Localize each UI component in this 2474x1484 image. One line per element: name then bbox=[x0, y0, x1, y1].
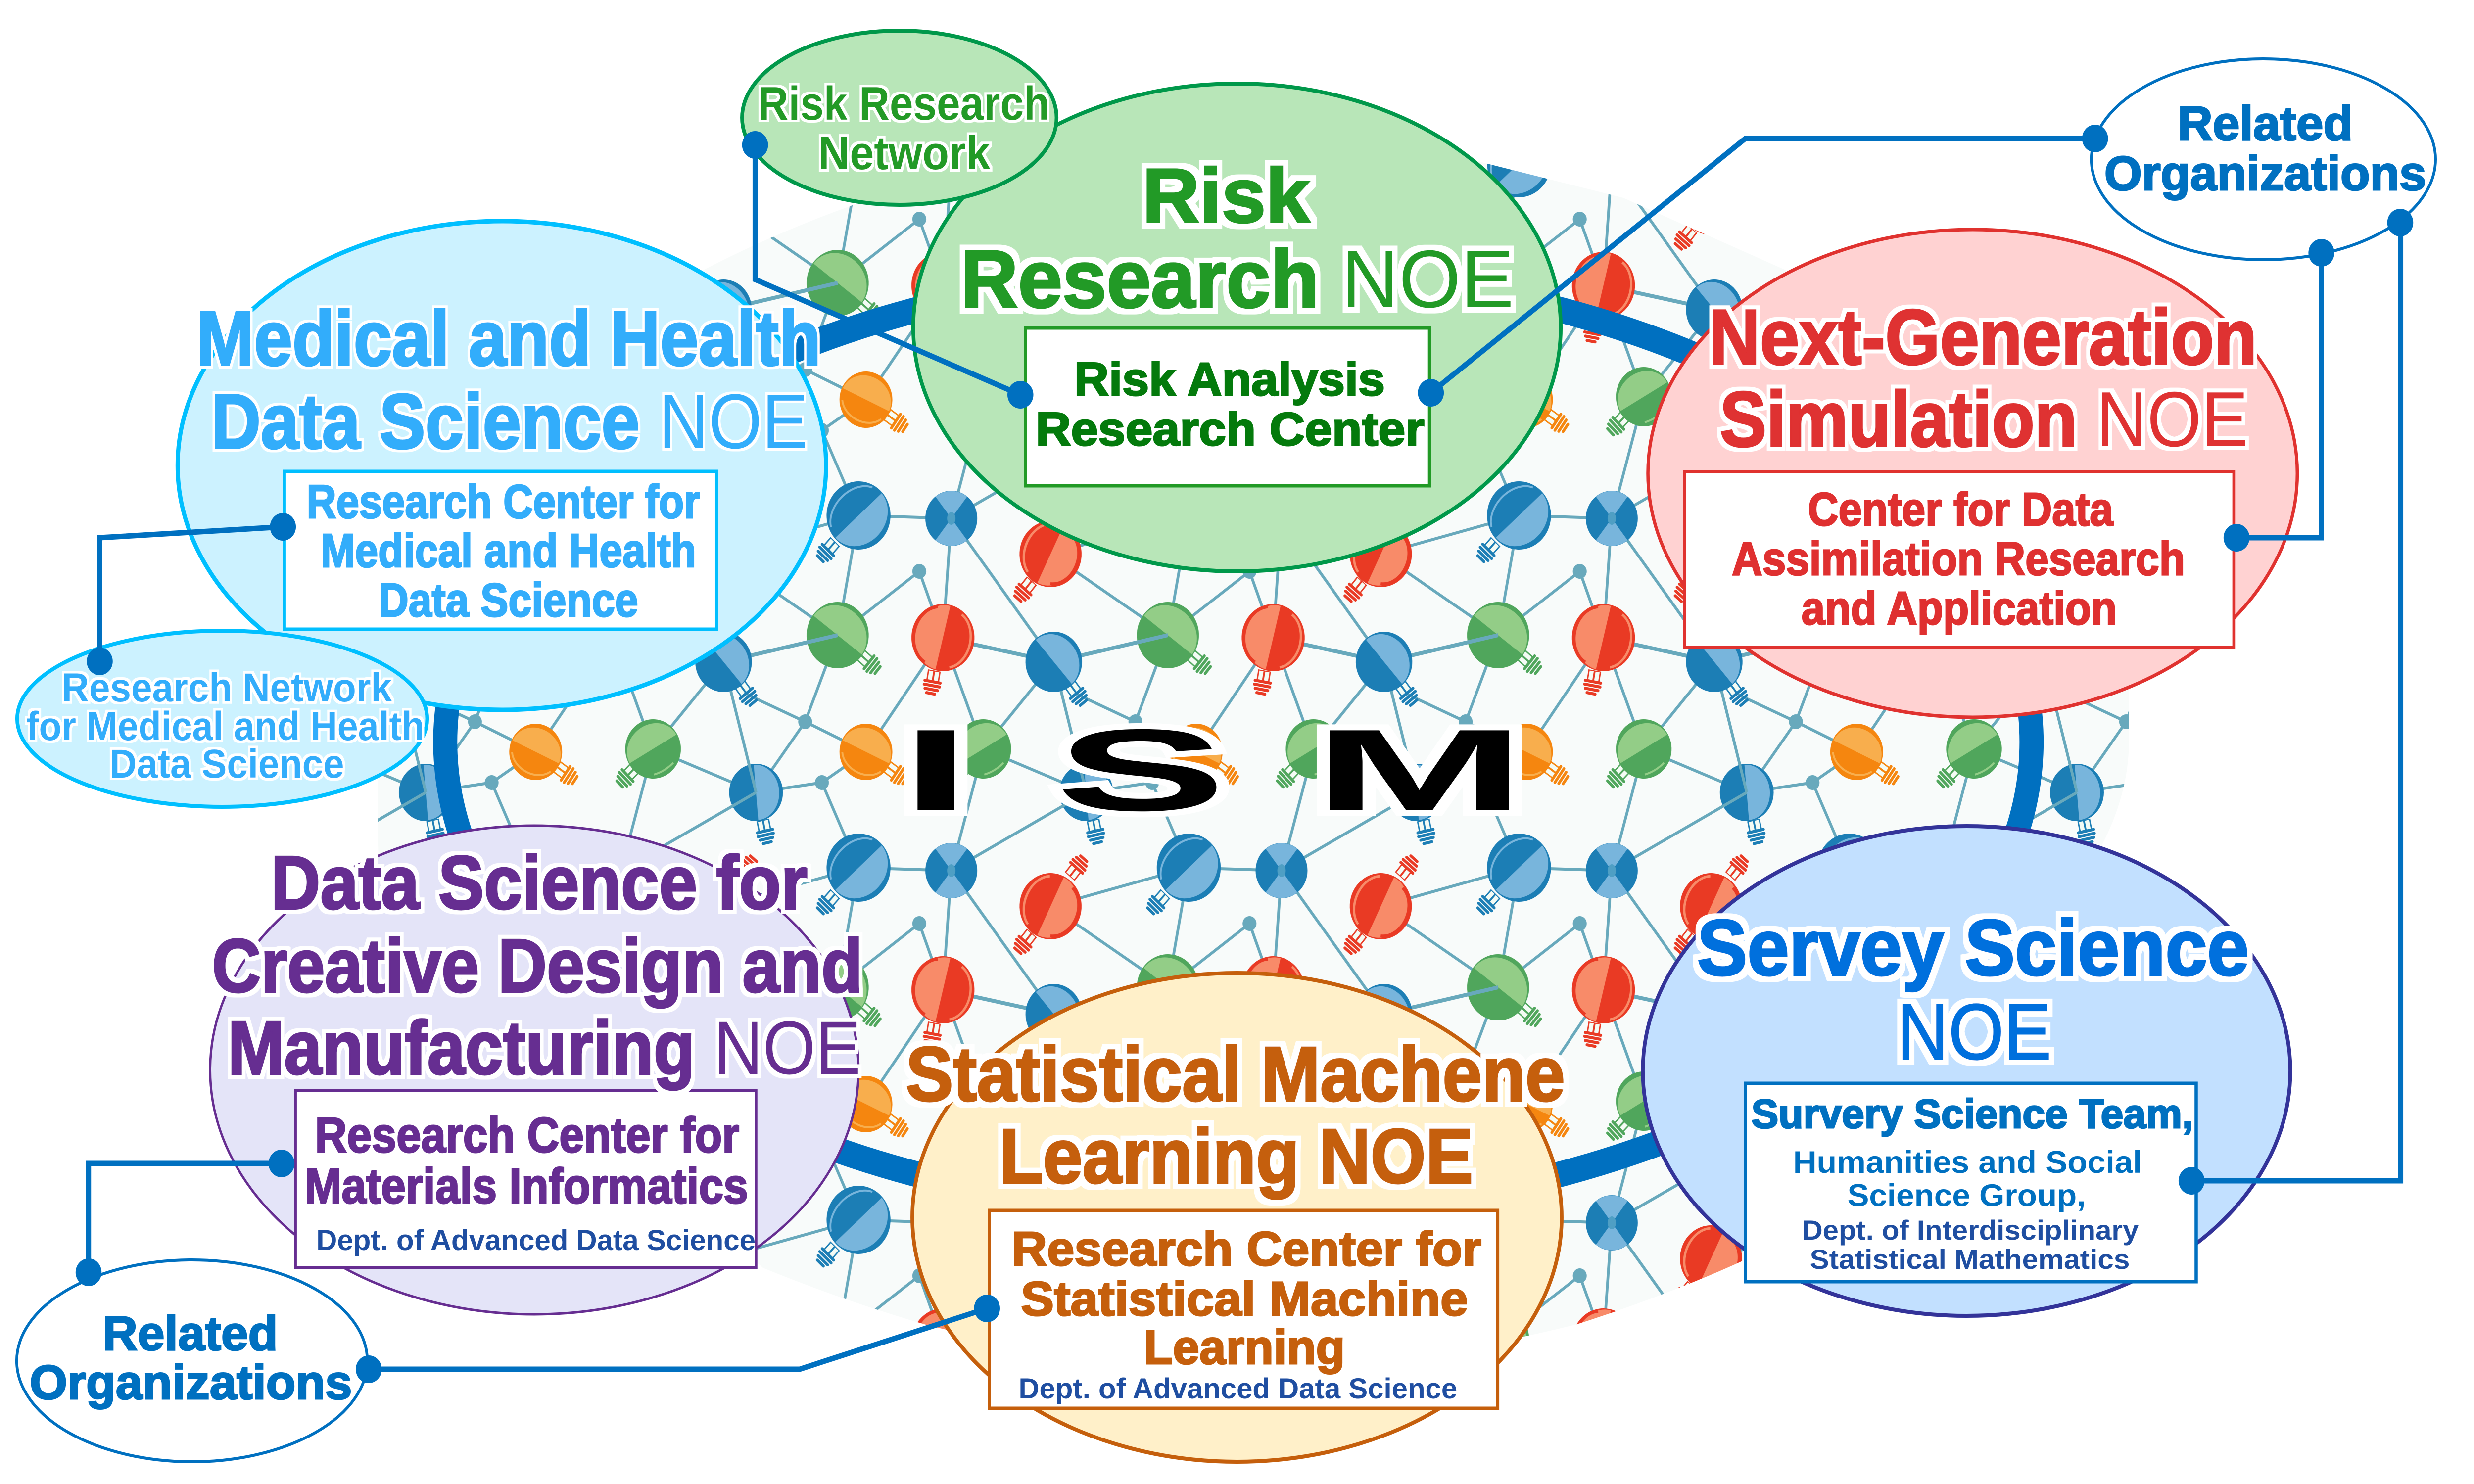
panel: Related Organizations bottom left: Related bbox=[102, 1306, 278, 1360]
panel: Data Science for Creative Design and Manufacturing NOE: Research Center for bbox=[315, 1107, 739, 1163]
panel: Data Science for Creative Design and Manufacturing NOE: Manufacturing NOE bbox=[228, 1006, 861, 1090]
connector: Risk Analysis Research Center to Related Organizations bbox=[1418, 125, 2108, 407]
panel: Medical and Health Data Science NOE: Medical and Health bbox=[196, 295, 821, 382]
panel: Next-Generation Simulation NOE: Assimilation Research bbox=[1732, 532, 2185, 585]
panel: Research Network for Medical and Health Data Science bbox=[17, 631, 427, 807]
panel: Data Science for Creative Design and Manufacturing NOE: Creative Design and bbox=[212, 924, 863, 1008]
connector: Related Organizations to Statistical Machine Learning center bbox=[356, 1295, 1000, 1383]
panel: Medical and Health Data Science NOE: Data Science bbox=[379, 573, 638, 627]
panel: Next-Generation Simulation NOE: Next-Generation bbox=[1709, 294, 2257, 381]
panel: Servey Science NOE: Science Group, bbox=[1848, 1178, 2086, 1212]
connector: Medical research center to Research Network bbox=[87, 513, 296, 675]
panel: Risk Research NOE: Risk Analysis bbox=[1074, 353, 1385, 406]
panel: Servey Science NOE: Servey Science bbox=[1697, 904, 2249, 992]
panel: Related Organizations top right: Organizations bbox=[2104, 146, 2426, 200]
panel: Research Network for Medical and Health Data Science: for Medical and Health bbox=[26, 703, 425, 749]
panel: Statistical Machine Learning NOE: Statistical Machine bbox=[1021, 1272, 1468, 1326]
panel: Medical and Health Data Science NOE bbox=[178, 221, 826, 710]
panel: Related Organizations bottom left: Organizations bbox=[30, 1355, 352, 1409]
panel: Related Organizations top right bbox=[2092, 59, 2435, 260]
title: ISM: I bbox=[901, 705, 972, 835]
panel: Servey Science NOE bbox=[1643, 826, 2290, 1316]
panel: Next-Generation Simulation NOE: and Application bbox=[1802, 582, 2117, 635]
connector: Related Organizations to Center for Data Assimilation bbox=[2224, 239, 2334, 552]
panel: Data Science for Creative Design and Manufacturing NOE bbox=[210, 826, 863, 1314]
panel: Next-Generation Simulation NOE bbox=[1648, 230, 2297, 717]
connector: Materials Informatics to Related Organizations bbox=[76, 1150, 294, 1286]
panel: Risk Research NOE bbox=[913, 84, 1561, 571]
panel: Statistical Machine Learning NOE: Research Center for bbox=[1011, 1222, 1481, 1276]
central ring connecting the NOEs bbox=[445, 269, 2032, 1215]
panel: Research Network for Medical and Health Data Science: Research Network bbox=[62, 665, 392, 710]
panel: Statistical Machine Learning NOE: Dept. of Advanced Data Science bbox=[1018, 1372, 1457, 1404]
panel: Medical and Health Data Science NOE: Data Science NOE bbox=[211, 378, 808, 465]
panel: Next-Generation Simulation NOE: Center for Data bbox=[1808, 483, 2113, 536]
panel: Servey Science NOE: Survery Science Team, bbox=[1752, 1091, 2193, 1137]
title: ISM bbox=[901, 705, 1526, 835]
title: ISM: S bbox=[1055, 705, 1227, 835]
connector: Risk Research Network to Risk Analysis Research Center bbox=[742, 131, 1033, 409]
panel: Medical and Health Data Science NOE: Research Center for bbox=[307, 475, 700, 528]
panel: Data Science for Creative Design and Manufacturing NOE: Materials Informatics bbox=[305, 1158, 748, 1214]
title: ISM: M bbox=[1313, 705, 1526, 835]
panel: Risk Research Network: Risk Research bbox=[758, 77, 1049, 130]
panel: Risk Research Network: Network bbox=[818, 126, 991, 180]
panel: Data Science for Creative Design and Manufacturing NOE: Dept. of Advanced Data Science bbox=[316, 1224, 756, 1256]
panel: Data Science for Creative Design and Manufacturing NOE: Data Science for bbox=[271, 841, 808, 925]
panel: Statistical Machine Learning NOE bbox=[906, 973, 1565, 1462]
panel: Research Network for Medical and Health Data Science: Data Science bbox=[109, 741, 344, 787]
background network pattern of balloons bbox=[371, 99, 2134, 1385]
panel: Risk Research NOE: Risk bbox=[1142, 153, 1310, 238]
panel: Risk Research NOE: Research Center bbox=[1036, 403, 1425, 456]
panel: Statistical Machine Learning NOE: Statistical Machene bbox=[906, 1031, 1565, 1117]
panel: Risk Research Network bbox=[742, 31, 1056, 205]
panel: Servey Science NOE: Dept. of Interdisciplinary bbox=[1802, 1214, 2139, 1246]
panel: Servey Science NOE: Statistical Mathematics bbox=[1810, 1244, 2130, 1275]
panel: Servey Science NOE: Humanities and Social bbox=[1793, 1145, 2142, 1179]
panel: Servey Science NOE: NOE bbox=[1897, 988, 2051, 1076]
panel: Risk Research NOE: Research NOE bbox=[960, 233, 1514, 325]
panel: Next-Generation Simulation NOE: Simulation NOE bbox=[1720, 376, 2248, 463]
panel: Medical and Health Data Science NOE: Medical and Health bbox=[321, 524, 696, 577]
connector: Related Organizations to Servey Science Team bbox=[2179, 209, 2413, 1195]
panel: Statistical Machine Learning NOE: Learning bbox=[1144, 1320, 1345, 1374]
panel: Statistical Machine Learning NOE: Learning NOE bbox=[999, 1113, 1473, 1200]
panel: Related Organizations bottom left bbox=[17, 1260, 367, 1462]
panel: Related Organizations top right: Related bbox=[2178, 96, 2353, 150]
